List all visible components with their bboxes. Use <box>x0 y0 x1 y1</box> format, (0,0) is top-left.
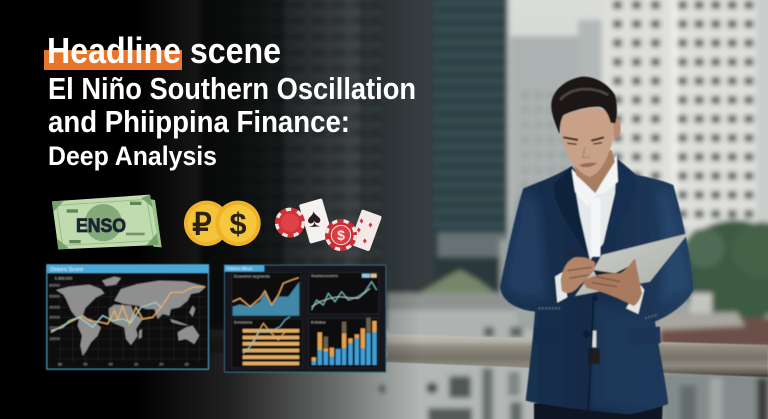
hair sheen <box>560 89 608 100</box>
map grid <box>58 282 206 362</box>
lower buildings <box>380 362 768 419</box>
panel header: Ostoro Score <box>47 265 209 273</box>
panel: world map dashboard: 80 <box>58 363 62 367</box>
dashboards <box>47 265 386 372</box>
eyebrows and eyes <box>563 137 604 141</box>
panel: world map dashboard: 10 <box>134 363 138 367</box>
subtitle line: and Phiippina Finance: and Phiippina Finance: <box>48 104 350 139</box>
panel: world map dashboard: 50000 <box>49 295 60 299</box>
panel: world map dashboard <box>47 265 209 369</box>
panel: world map dashboard: 90 <box>83 363 87 367</box>
subtitle line: Deep Analysis: Deep Analysis <box>48 141 217 171</box>
neck <box>574 150 615 193</box>
heading: Headline scene: Headline scene <box>47 30 281 71</box>
subtitle line: El Nino Southern Oscillation: El Niño Southern Oscillation <box>48 71 416 106</box>
icon: casino chips and cards: ♦ <box>368 219 373 229</box>
icon: peso and dollar coins: ₽ <box>192 208 212 242</box>
shirt cuffs <box>555 272 567 303</box>
chart: stacked bars: Extratos <box>311 319 326 324</box>
hands <box>561 257 595 293</box>
sleeve highlight <box>505 193 548 300</box>
collar <box>571 168 597 207</box>
chart: horizontal bars with line <box>232 317 302 368</box>
icon: ENSO banknote: ENSO <box>76 216 126 237</box>
hair <box>551 77 617 134</box>
ear <box>613 118 621 138</box>
panel: world map dashboard: 10000 <box>49 337 60 341</box>
panel: world map dashboard: 60000 <box>49 284 60 288</box>
chart: line chart <box>309 272 379 314</box>
panel: world map dashboard: 00 <box>109 363 113 367</box>
icon: casino chips and cards: ♦ <box>357 225 362 235</box>
panel: world map dashboard: 30000 <box>49 315 60 319</box>
icon row <box>52 195 382 252</box>
pen <box>565 251 595 264</box>
panel: world map dashboard: Ostoro Score <box>50 267 83 273</box>
panel: multi-chart dashboard: Ostoro Bkos <box>227 266 253 271</box>
panel: world map dashboard: 20 <box>159 363 163 367</box>
icon: casino chips and cards: $ <box>337 227 345 243</box>
panel: multi-chart dashboard <box>224 265 386 372</box>
icon: casino chips and cards <box>275 198 382 252</box>
panel: world map dashboard: 20000 <box>49 326 60 330</box>
trees <box>677 220 768 324</box>
panel: world map dashboard: 40000 <box>49 305 60 309</box>
panel: world map dashboard: 30 <box>185 363 189 367</box>
jacket body <box>500 159 693 414</box>
dark gradient overlay on left side <box>0 0 420 419</box>
lapels <box>554 167 588 257</box>
chart: area and line: Economic segments <box>234 273 270 278</box>
jacket details <box>533 328 560 344</box>
tablet <box>575 233 688 296</box>
panel header: Ostoro Bkos <box>224 265 264 272</box>
trousers <box>534 403 663 419</box>
icon: peso and dollar coins: $ <box>229 207 247 241</box>
person: businessman with tablet <box>500 77 693 419</box>
shirt <box>573 162 617 260</box>
chart: stacked bars <box>309 318 379 368</box>
icon: casino chips and cards: ♦ <box>363 235 368 245</box>
panel: world map dashboard: 1,860,000 <box>55 276 73 281</box>
highlight bar behind first word <box>44 50 182 70</box>
data lines on map <box>51 287 204 332</box>
title block <box>44 30 416 171</box>
shrub on roof <box>420 270 495 293</box>
chart: line chart: Socioeconomic <box>311 273 338 278</box>
chart: area and line <box>232 272 301 316</box>
icon: casino chips and cards: ♠ <box>306 202 322 233</box>
face <box>560 108 614 177</box>
icon: peso and dollar coins <box>184 201 261 246</box>
icon: ENSO banknote <box>52 195 162 249</box>
chart: horizontal bars with line: Emissions <box>234 320 252 325</box>
nose and mouth <box>583 147 590 157</box>
world map land masses <box>56 277 206 356</box>
icon: casino chips and cards: ♦ <box>359 215 364 225</box>
